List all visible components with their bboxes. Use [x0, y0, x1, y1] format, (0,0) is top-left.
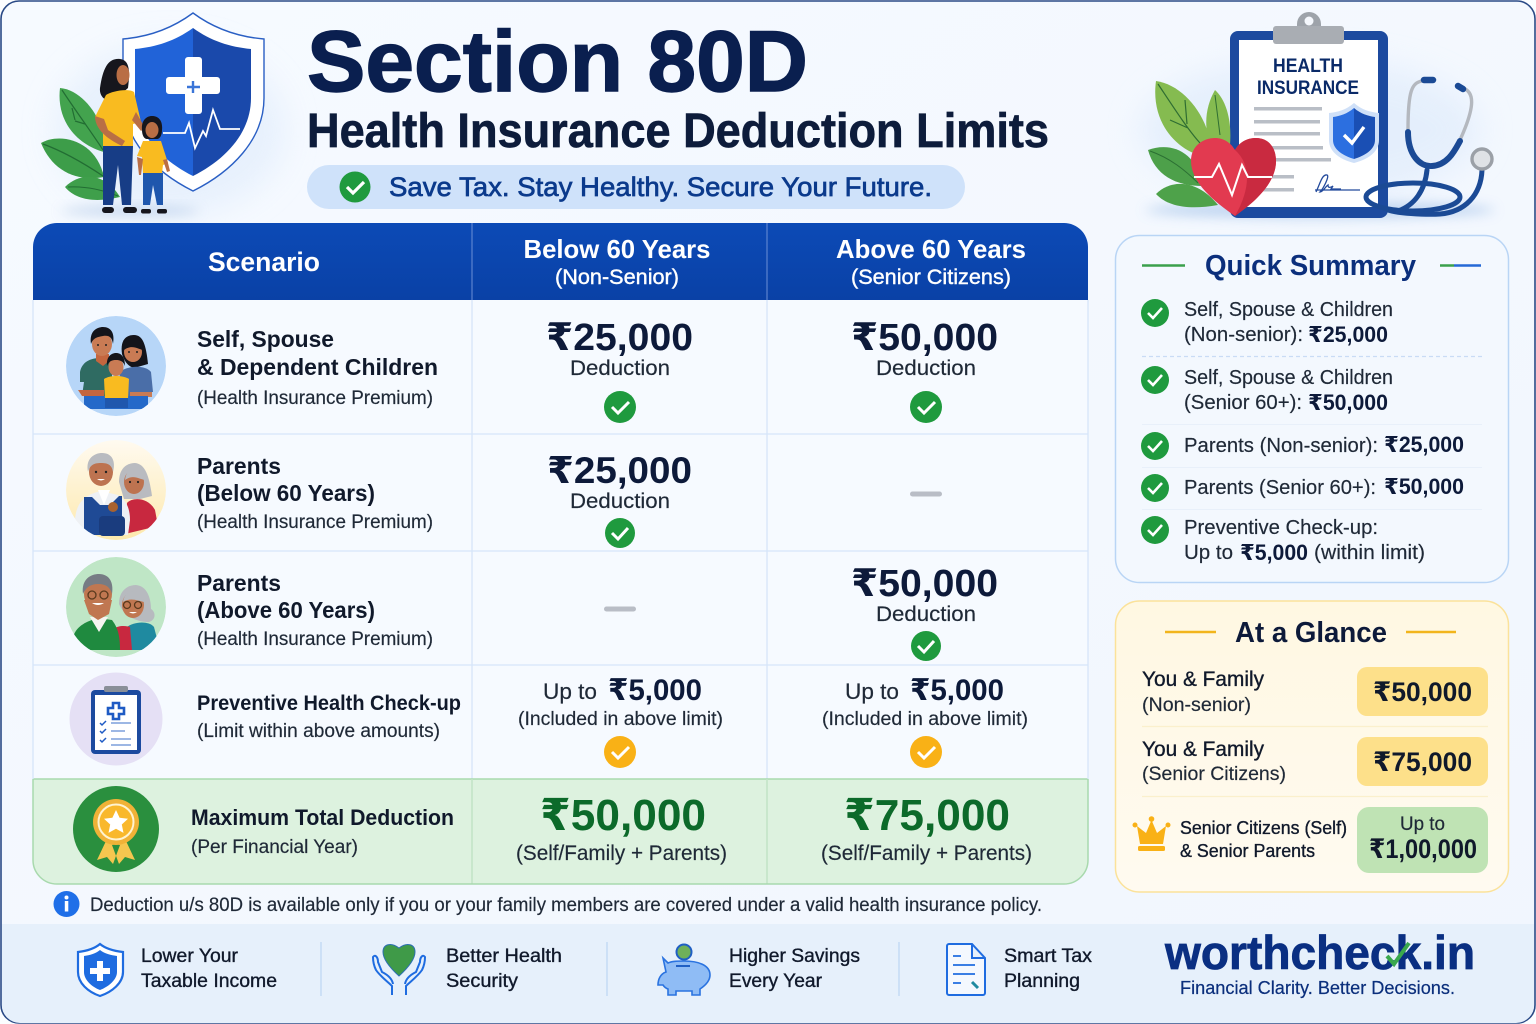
row label: Self, Spouse: [197, 326, 334, 352]
glance row: you and family non-senior: [1142, 667, 1488, 716]
benefit: higher savings: Every Year: [729, 971, 823, 992]
above 60 value: (Included in above limit): [822, 709, 1028, 730]
subtitle: Health Insurance Deduction Limits: [307, 105, 1049, 158]
benefit: lower taxable income: Taxable Income: [141, 971, 277, 992]
icon: piggy bank: [658, 944, 710, 995]
above 60 value: ₹50,000: [851, 563, 998, 605]
row label: (Health Insurance Premium): [197, 388, 433, 409]
glance row: you and family non-senior: ₹50,000: [1373, 677, 1472, 707]
glance row: you and family senior: ₹75,000: [1373, 747, 1472, 777]
row: self, spouse and children: [66, 316, 998, 423]
benefit: smart tax planning: Smart Tax: [1004, 946, 1093, 967]
below 60 value: Deduction: [570, 490, 670, 513]
comparison table: [33, 223, 1088, 884]
row label: Maximum Total Deduction: [191, 805, 454, 830]
heart: [1191, 138, 1276, 216]
glance row: you and family non-senior: (Non-senior): [1142, 695, 1251, 716]
tagline pill: [307, 165, 965, 209]
eligibility note: Deduction u/s 80D is available only if you or your family members are covered under a valid health insurance policy.: [90, 895, 1042, 916]
above 60 value: Up to: [845, 679, 899, 704]
row label: (Below 60 Years): [197, 480, 375, 506]
summary item 5: Up to: [1184, 542, 1233, 564]
icon: award medal: [73, 786, 159, 872]
icon: tax document: [947, 944, 985, 995]
glance row: senior citizens and senior parents: ₹1,00,000: [1369, 834, 1477, 864]
not applicable dash: [910, 492, 942, 496]
summary item 1: Self, Spouse & Children: [1184, 299, 1393, 321]
below 60 value: (Included in above limit): [518, 709, 723, 730]
summary item 5: Preventive Check-up:: [1184, 517, 1378, 539]
summary item 5: (within limit): [1314, 542, 1425, 564]
above 60 total: (Self/Family + Parents): [821, 842, 1032, 865]
tagline pill: Save Tax. Stay Healthy. Secure Your Future.: [389, 172, 932, 202]
benefit: higher savings: Higher Savings: [729, 946, 860, 967]
table header: (Senior Citizens): [851, 266, 1011, 289]
title: Section 80D: [307, 14, 808, 110]
woman figure: [95, 59, 145, 213]
stethoscope: [1366, 80, 1492, 214]
row label: Preventive Health Check-up: [197, 692, 461, 715]
row label: [197, 570, 433, 650]
benefit: lower taxable income: Lower Your: [141, 946, 239, 967]
summary item 4: [1141, 474, 1464, 502]
above 60 total: ₹75,000: [844, 791, 1010, 840]
row label: [197, 692, 461, 742]
icon: checklist clipboard: [70, 672, 162, 766]
summary item 1: (Non-senior):: [1184, 324, 1303, 346]
glance row: senior citizens and senior parents: Senior Citizens (Self): [1180, 818, 1347, 838]
summary item 2: Self, Spouse & Children: [1184, 367, 1393, 389]
table header: Below 60 Years: [524, 234, 710, 264]
glance row: senior citizens and senior parents: Up to: [1400, 814, 1445, 835]
below 60 value: ₹25,000: [546, 317, 693, 359]
glance row: you and family non-senior: You & Family: [1142, 668, 1264, 691]
summary item 3: ₹25,000: [1384, 432, 1464, 457]
illustration: shield with family: [41, 13, 285, 215]
table header: Above 60 Years: [836, 234, 1026, 264]
brand logo: worthcheck.in: [1164, 926, 1475, 979]
row label: (Health Insurance Premium): [197, 512, 433, 533]
row label: (Above 60 Years): [197, 597, 375, 623]
heading: at a glance: At a Glance: [1235, 617, 1387, 649]
benefit: higher savings: [658, 944, 860, 995]
summary item 5: [1141, 516, 1425, 565]
not applicable dash: [604, 606, 636, 612]
below 60 value: ₹5,000: [608, 674, 702, 707]
icon: senior parents: [66, 557, 166, 657]
summary item 4: ₹50,000: [1384, 474, 1464, 499]
above 60 value: [822, 674, 1028, 768]
above 60 value: ₹5,000: [910, 674, 1004, 707]
glance row: senior citizens and senior parents: & Senior Parents: [1180, 841, 1315, 861]
below 60 total: [516, 791, 727, 865]
above 60 value: Deduction: [876, 357, 976, 380]
table header: Scenario: [208, 247, 320, 277]
glance row: you and family senior: You & Family: [1142, 738, 1264, 761]
row: parents below 60: [66, 440, 942, 548]
heading: quick summary: Quick Summary: [1205, 250, 1416, 282]
icon: shield: [78, 944, 123, 996]
summary item 4: Parents (Senior 60+):: [1184, 477, 1376, 499]
clipboard: INSURANCE: [1257, 78, 1359, 99]
brand logo: Financial Clarity. Better Decisions.: [1180, 978, 1455, 998]
above 60 value: Deduction: [876, 603, 976, 626]
benefit: better health security: [373, 945, 562, 995]
glance row: you and family senior: (Senior Citizens): [1142, 764, 1286, 785]
row label: [197, 453, 433, 533]
icon: heart in hands: [373, 945, 425, 995]
footer band: [2, 924, 1534, 1023]
below 60 value: ₹25,000: [547, 450, 692, 491]
above 60 value: ₹50,000: [851, 317, 998, 359]
child figure: [137, 116, 170, 214]
row label: & Dependent Children: [197, 354, 438, 380]
row: preventive check-up: [70, 672, 1028, 768]
icon: young family: [66, 316, 166, 416]
below 60 value: Deduction: [570, 357, 670, 380]
benefit: better health security: Better Health: [446, 946, 562, 967]
benefit: lower taxable income: [78, 944, 277, 996]
summary item 3: [1141, 432, 1464, 460]
summary item 3: Parents (Non-senior):: [1184, 435, 1378, 457]
below 60 value: Up to: [543, 679, 597, 704]
summary item 1: ₹25,000: [1308, 322, 1388, 347]
leaves: [1148, 81, 1230, 207]
row: maximum total deduction: [73, 786, 1032, 872]
row label: (Health Insurance Premium): [197, 629, 433, 650]
row label: [191, 805, 454, 858]
summary item 2: (Senior 60+):: [1184, 392, 1302, 414]
above 60 value: [851, 317, 998, 423]
glance row: you and family senior: [1142, 737, 1488, 786]
summary item 2: [1141, 366, 1393, 415]
summary item 1: [1141, 299, 1393, 347]
table header: [208, 234, 1026, 289]
row: parents above 60: [66, 557, 998, 661]
below 60 value: [546, 317, 693, 423]
summary item 2: ₹50,000: [1308, 390, 1388, 415]
panel: at a glance: [1116, 601, 1508, 892]
above 60 total: [821, 791, 1032, 865]
icon: crown: [1132, 816, 1170, 851]
row label: (Limit within above amounts): [197, 721, 440, 742]
illustration: clipboard, heart, stethoscope: [1140, 12, 1495, 218]
row label: Parents: [197, 570, 281, 596]
benefit: smart tax planning: Planning: [1004, 971, 1080, 992]
row label: Parents: [197, 453, 281, 479]
below 60 total: ₹50,000: [540, 791, 706, 840]
row label: (Per Financial Year): [191, 837, 358, 858]
summary item 5: ₹5,000: [1240, 540, 1308, 565]
above 60 value: [851, 563, 998, 661]
clipboard: [1230, 12, 1388, 218]
clipboard: HEALTH: [1273, 56, 1343, 77]
benefit: smart tax planning: [947, 944, 1093, 995]
benefit: better health security: Security: [446, 971, 519, 992]
below 60 total: (Self/Family + Parents): [516, 842, 727, 865]
row label: [197, 326, 438, 409]
below 60 value: [518, 674, 723, 768]
table header: (Non-Senior): [555, 266, 679, 289]
icon: parents below 60: [66, 440, 166, 540]
panel: quick summary: [1116, 236, 1508, 582]
below 60 value: [547, 450, 692, 548]
glance row: senior citizens and senior parents: [1132, 807, 1488, 873]
